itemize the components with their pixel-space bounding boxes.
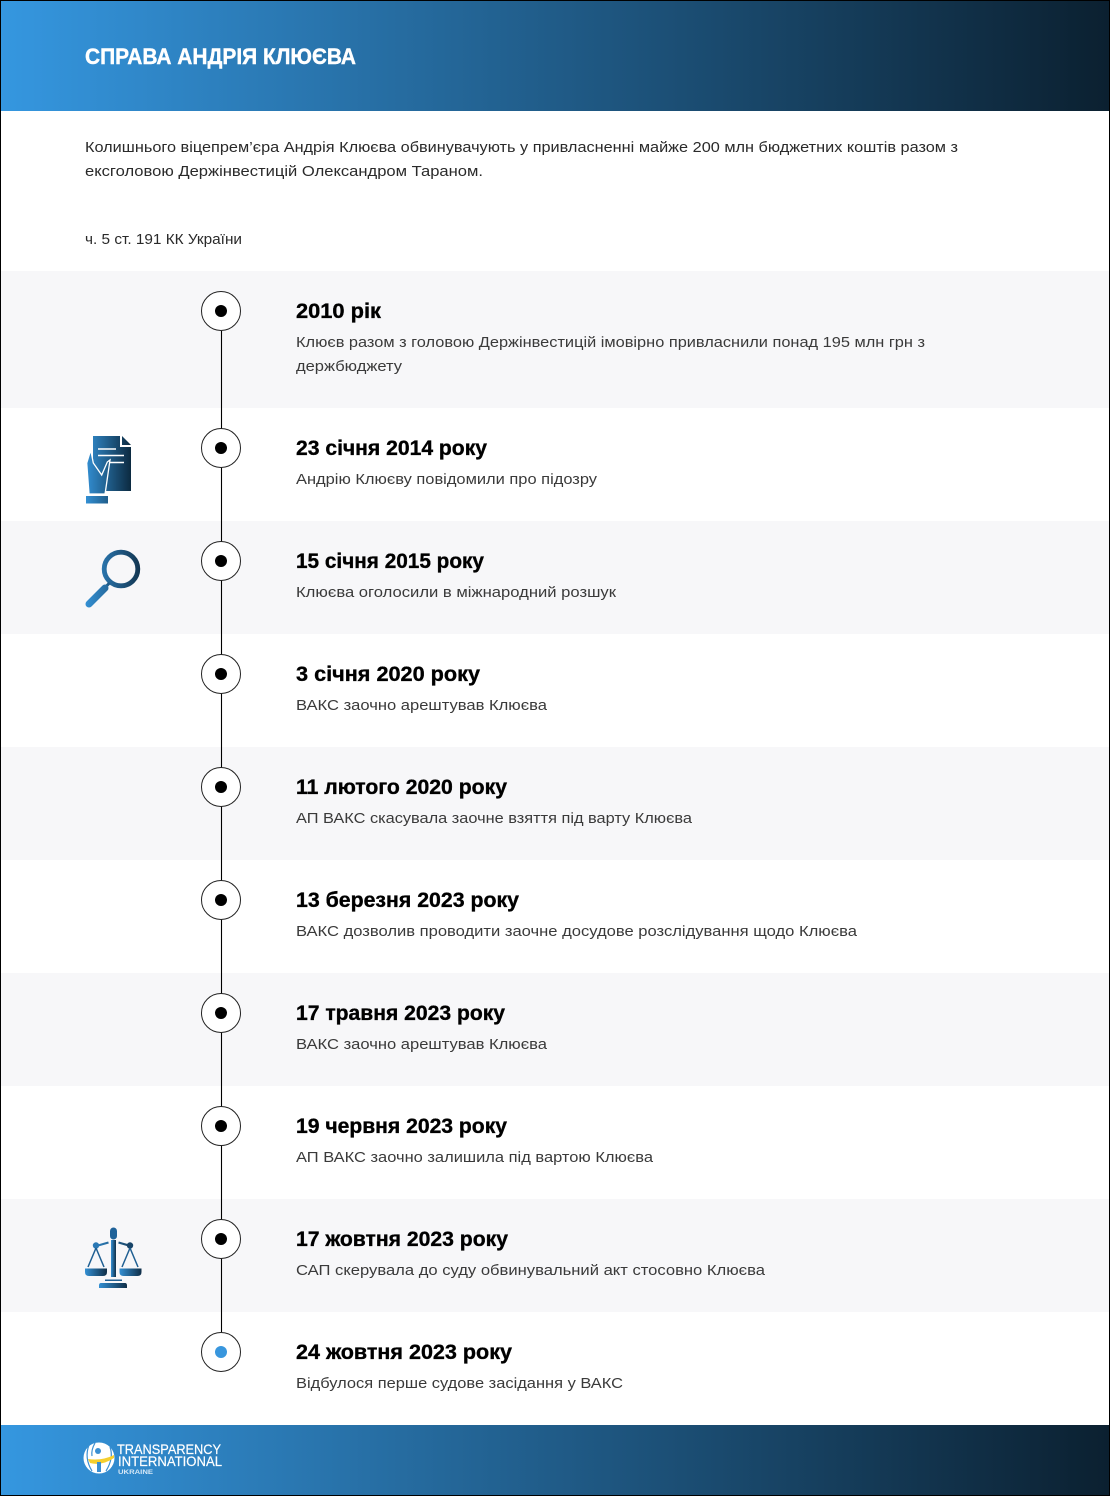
event: 17 October 2023: 17 жовтня 2023 року bbox=[296, 1228, 508, 1251]
icon: magnifying glass bbox=[89, 552, 138, 604]
event: 19 June 2023: АП ВАКС заочно залишила під вартою Клюєва bbox=[296, 1149, 654, 1166]
event: 17 May 2023: ВАКС заочно арештував Клюєва bbox=[296, 1036, 548, 1053]
event: 19 June 2023 bbox=[202, 1106, 654, 1166]
intro text: Колишнього віцепрем’єра Андрія Клюєва обвинувачують у привласненні майже 200 млн бюджетних коштів разом з bbox=[85, 139, 958, 156]
event: 13 March 2023: ВАКС дозволив проводити заочне досудове розслідування щодо Клюєва bbox=[296, 923, 858, 940]
event: 17 May 2023 bbox=[202, 994, 548, 1053]
event: 2010: Клюєв разом з головою Держінвестицій імовірно привласнили понад 195 млн грн з bbox=[296, 334, 925, 351]
header banner bbox=[0, 0, 1110, 111]
event: 17 October 2023 bbox=[202, 1220, 766, 1279]
event: 23 January 2014: 23 січня 2014 року bbox=[296, 437, 487, 460]
event: 24 October 2023: Відбулося перше судове засідання у ВАКС bbox=[296, 1375, 623, 1392]
event: 15 January 2015 bbox=[202, 542, 616, 601]
alternating row bands bbox=[0, 271, 1110, 1312]
logo: Transparency International Ukraine bbox=[84, 1441, 222, 1476]
footer banner bbox=[0, 1425, 1110, 1496]
event: 13 March 2023: 13 березня 2023 року bbox=[296, 889, 519, 912]
event: 2010: держбюджету bbox=[296, 358, 403, 375]
icon: document in hand bbox=[86, 436, 131, 504]
timeline axis bbox=[220, 331, 222, 1332]
event: 2010 bbox=[202, 292, 925, 375]
intro text: ексголовою Держінвестицій Олександром Тараном. bbox=[85, 163, 483, 180]
event: 17 May 2023: 17 травня 2023 року bbox=[296, 1002, 505, 1025]
icon: scales of justice bbox=[85, 1228, 142, 1288]
event: 11 February 2020: 11 лютого 2020 року bbox=[296, 776, 507, 799]
logo: Transparency International Ukraine: UKRAINE bbox=[118, 1469, 154, 1476]
event: 24 October 2023 bbox=[202, 1332, 623, 1392]
legal article reference: ч. 5 ст. 191 КК України bbox=[85, 231, 242, 248]
logo: Transparency International Ukraine: TRANSPARENCY bbox=[117, 1441, 222, 1457]
event: 24 October 2023: 24 жовтня 2023 року bbox=[296, 1341, 512, 1364]
event: 2010: 2010 рік bbox=[296, 300, 381, 323]
event: 19 June 2023: 19 червня 2023 року bbox=[296, 1115, 507, 1138]
title: СПРАВА АНДРІЯ КЛЮЄВА bbox=[85, 44, 356, 69]
event: 11 February 2020: АП ВАКС скасувала заочне взяття під варту Клюєва bbox=[296, 810, 693, 827]
event: 15 January 2015: Клюєва оголосили в міжнародний розшук bbox=[296, 584, 616, 601]
event: 3 January 2020: ВАКС заочно арештував Клюєва bbox=[296, 697, 548, 714]
event: 3 January 2020 bbox=[202, 654, 548, 714]
event: 23 January 2014 bbox=[202, 428, 598, 488]
event: 3 January 2020: 3 січня 2020 року bbox=[296, 663, 480, 686]
event: 13 March 2023 bbox=[202, 880, 858, 940]
event: 11 February 2020 bbox=[202, 768, 693, 827]
event: 17 October 2023: САП скерувала до суду обвинувальний акт стосовно Клюєва bbox=[296, 1262, 766, 1279]
logo: Transparency International Ukraine: INTERNATIONAL bbox=[118, 1453, 222, 1469]
intro text bbox=[85, 139, 958, 180]
event: 23 January 2014: Андрію Клюєву повідомили про підозру bbox=[296, 471, 598, 488]
event: 15 January 2015: 15 січня 2015 року bbox=[296, 550, 484, 573]
